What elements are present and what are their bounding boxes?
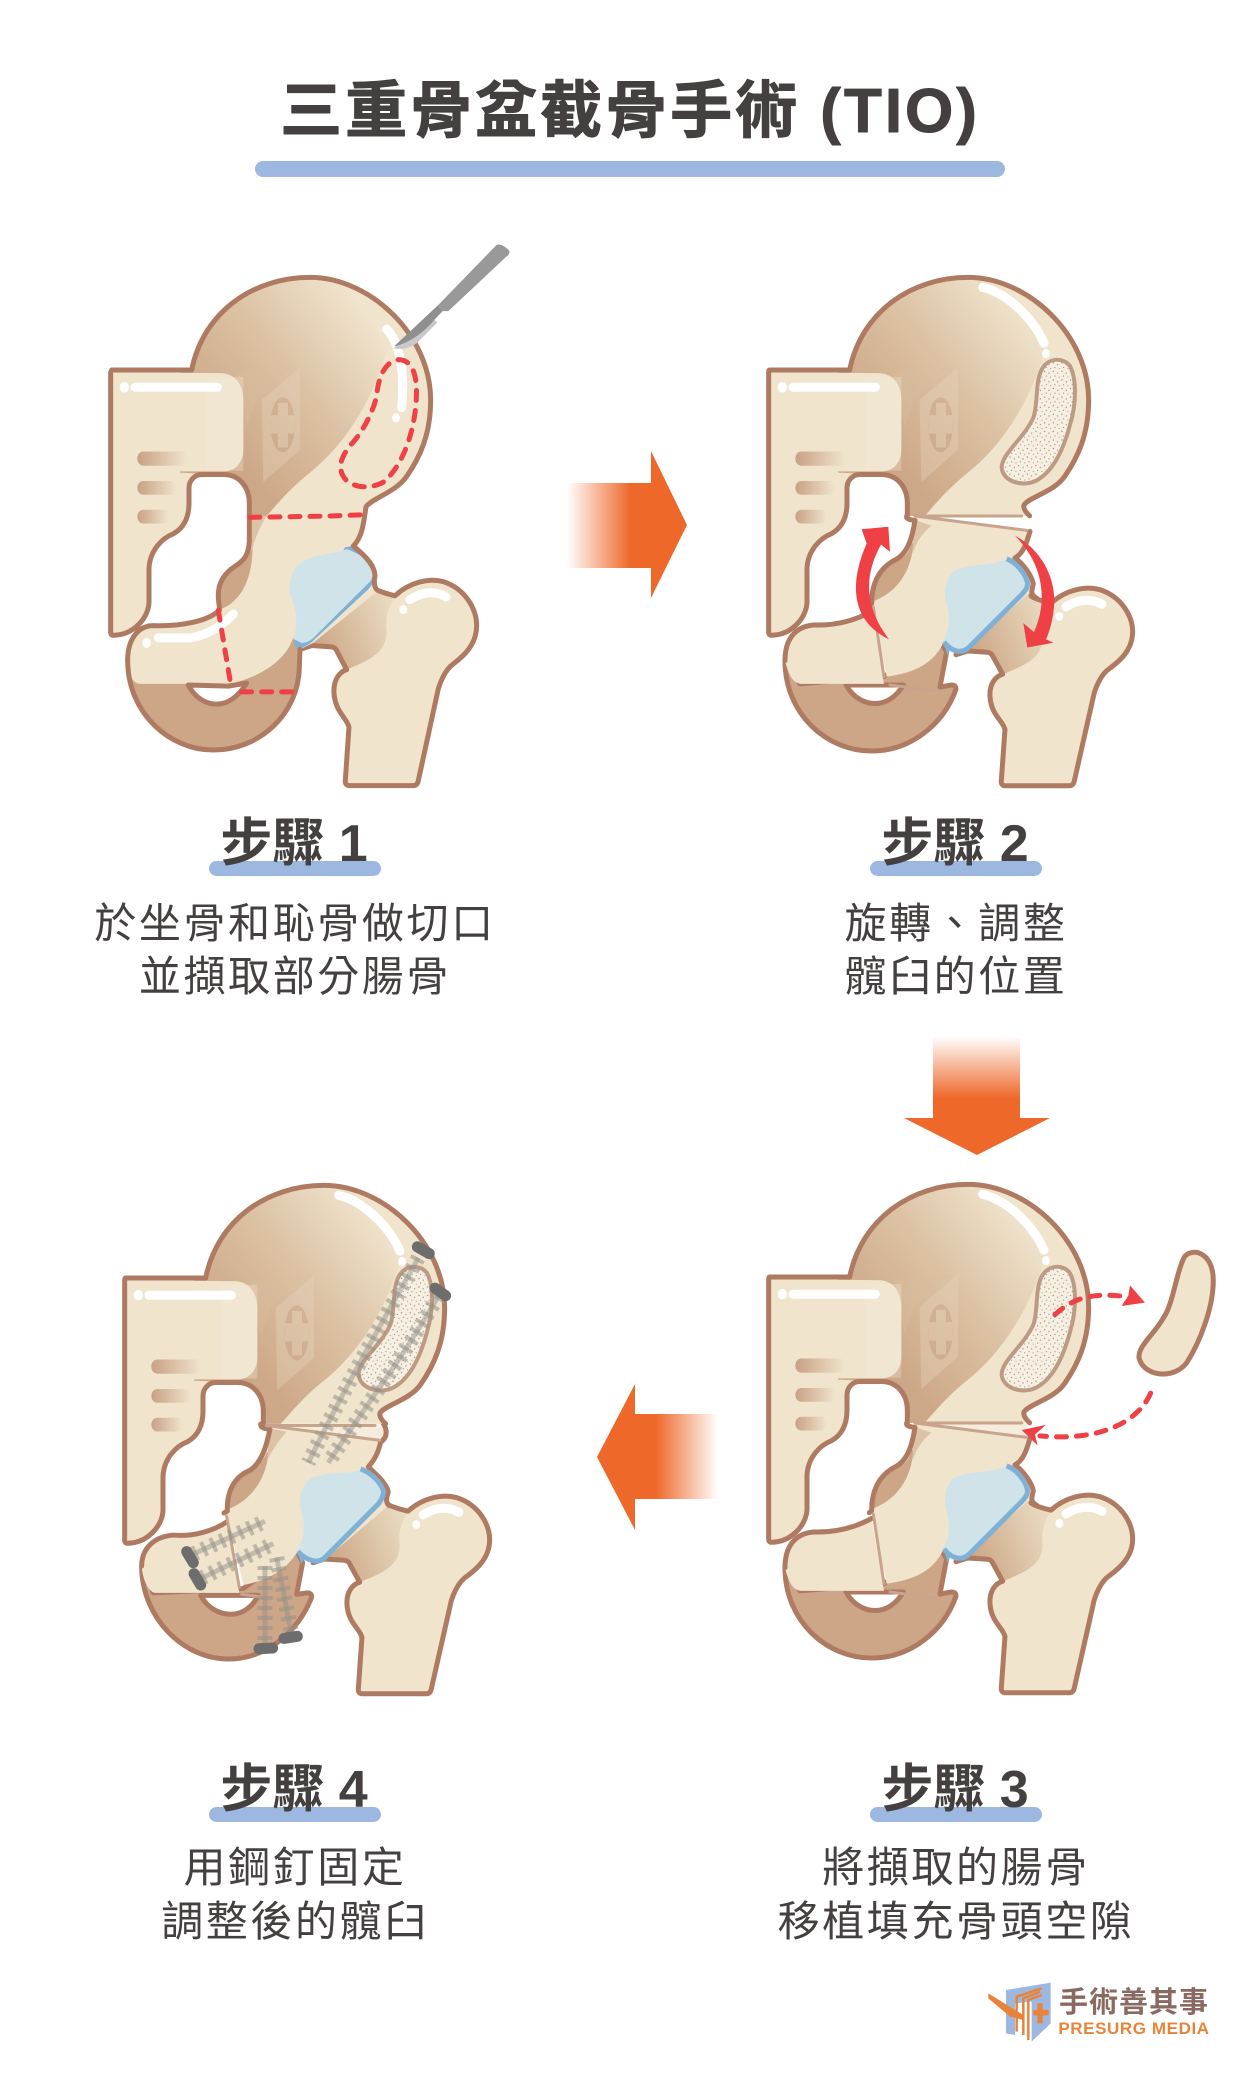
step 1 description [94,900,496,1000]
screw heads [187,1247,446,1649]
bone cuts and screws [187,1247,446,1649]
step 1 description: 於坐骨和恥骨做切口 [94,900,496,947]
upper fragment step 2 [769,277,1089,635]
upper fragment step 4 [125,1185,445,1543]
middle and lower fragments step 3 [785,1423,1037,1658]
title underline [255,161,1005,177]
arrow: step 2 to 3 [904,1036,1050,1155]
screw 1 [308,1258,418,1463]
panel: step 1 pelvis illustration [111,244,509,786]
logo: 手術善其事 [1059,1986,1209,2019]
graft site step 4 [359,1267,432,1390]
title: 三重骨盆截骨手術 (TIO) [280,77,980,146]
arrow: step 1 to 2 [567,451,687,598]
screw 5 [262,1566,267,1647]
step 3 description [778,1844,1134,1945]
step 2 description [844,900,1068,1000]
incision: pubis [242,689,295,694]
panel: step 3 pelvis illustration [769,1184,1213,1693]
harvested graft site step 2 [915,360,1075,530]
step 2 description: 髖臼的位置 [844,953,1068,1000]
panel: step 2 pelvis illustration [769,277,1133,786]
dashed graft transfer arrows [1022,1285,1151,1446]
screw 6 [277,1557,292,1635]
rotation arrows [856,527,1054,647]
step 1 description: 並擷取部分腸骨 [139,953,451,1000]
femur step 2 [949,584,1133,786]
logo [988,1983,1210,2042]
femur step 3 [949,1491,1133,1693]
middle and lower fragments step 2 [785,516,1037,751]
screw 2 [328,1296,438,1463]
step 2 description: 旋轉、調整 [844,900,1068,947]
step 3 description: 移植填充骨頭空隙 [778,1898,1134,1945]
panel: step 4 pelvis illustration [125,1185,490,1694]
incision: ilium [250,515,363,517]
step 4 description: 調整後的髖臼 [161,1898,429,1945]
screw 3 [193,1521,265,1554]
step 4 heading: 步驟 4 [220,1761,368,1819]
incision: ischium [218,610,231,684]
femur step 4 [306,1492,490,1694]
screw 4 [202,1544,273,1578]
step 4 description [161,1844,429,1945]
arrow: step 3 to 4 [597,1384,718,1530]
graft site step 3 [915,1267,1075,1437]
step 4 description: 用鋼釘固定 [183,1844,407,1891]
step 2 heading: 步驟 2 [881,815,1029,873]
logo: PRESURG MEDIA [1058,2019,1210,2038]
removed graft piece [1139,1252,1213,1374]
step 1 heading: 步驟 1 [220,815,368,873]
middle and lower fragments step 4 [142,1418,389,1659]
femur step 1 [293,576,477,786]
upper fragment step 3 [769,1184,1089,1542]
icon: scalpel [393,244,509,349]
step 3 heading: 步驟 3 [881,1761,1029,1819]
pelvis step 1 [111,244,509,750]
step 3 description: 將擷取的腸骨 [822,1844,1090,1891]
incision: graft harvest [341,360,417,487]
icon: book and scalpel [988,1983,1051,2042]
